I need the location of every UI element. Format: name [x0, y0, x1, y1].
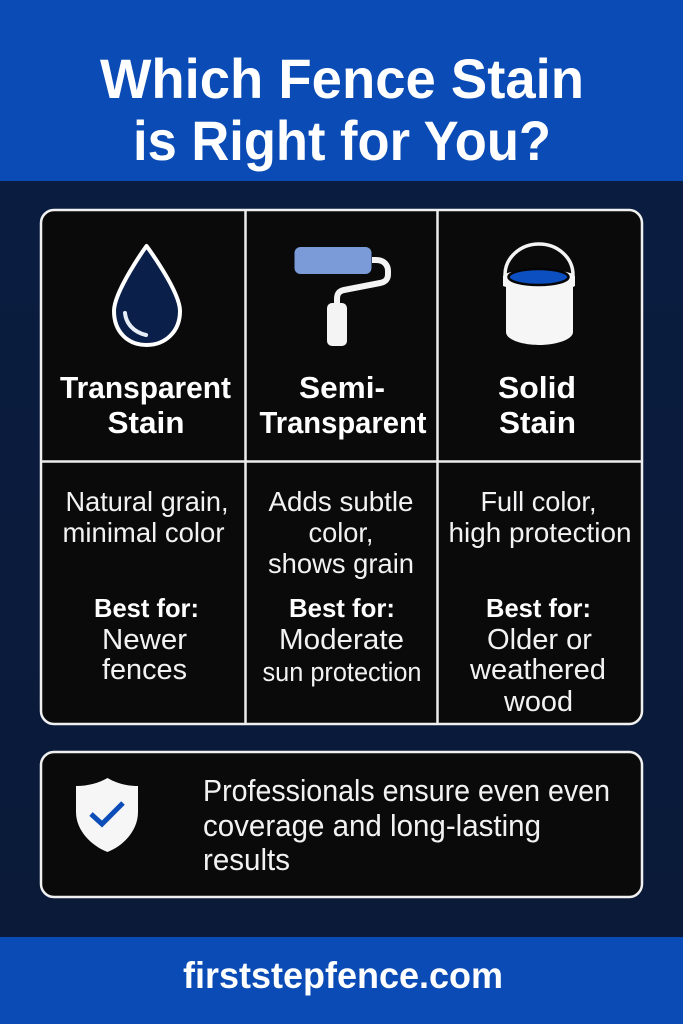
text: solid stain details: [448, 486, 632, 718]
callout text: [203, 773, 610, 877]
text: transparent details: Natural grain,: [66, 486, 228, 517]
text: solid stain details: Older or: [487, 624, 592, 656]
icon: water drop: [114, 246, 180, 345]
text: transparent details: [62, 486, 228, 686]
text: semi-transparent details: [262, 486, 422, 687]
text: semi-transparent details: shows grain: [268, 548, 414, 579]
icon: paint bucket: [503, 244, 575, 345]
icon: paint roller: [294, 247, 388, 346]
column heading: solid stain: [498, 370, 576, 440]
title: Which Fence Stain: [100, 47, 584, 110]
callout text: results: [203, 842, 290, 877]
text: transparent details: minimal color: [62, 517, 224, 548]
text: solid stain details: high protection: [448, 517, 632, 548]
text: semi-transparent details: Best for:: [289, 593, 395, 623]
panel: professionals callout: [41, 752, 642, 897]
website url: firststepfence.com: [183, 955, 503, 996]
title: [100, 47, 584, 172]
text: semi-transparent details: Moderate: [279, 624, 404, 656]
title: is Right for You?: [133, 109, 551, 172]
text: solid stain details: Full color,: [480, 486, 596, 517]
text: transparent details: Newer: [102, 624, 187, 656]
text: solid stain details: wood: [503, 686, 573, 718]
column heading: semi-transparent: [260, 370, 426, 440]
text: semi-transparent details: Adds subtle: [268, 486, 414, 517]
column heading: semi-transparent: Semi-: [299, 370, 385, 405]
column heading: semi-transparent: Transparent: [260, 405, 426, 440]
column heading: transparent stain: Transparent: [60, 370, 231, 405]
footer banner: [0, 937, 683, 1024]
text: solid stain details: Best for:: [486, 593, 591, 623]
panel: comparison table: [41, 210, 642, 724]
text: transparent details: fences: [102, 654, 187, 686]
text: transparent details: Best for:: [94, 593, 199, 623]
header banner: [0, 0, 683, 181]
text: semi-transparent details: color,: [308, 517, 374, 548]
column heading: solid stain: Stain: [499, 405, 576, 440]
callout text: coverage and long-lasting: [203, 808, 541, 843]
column heading: transparent stain: [60, 370, 231, 440]
callout text: Professionals ensure even even: [203, 773, 610, 808]
icon: shield with check: [76, 778, 138, 852]
column heading: transparent stain: Stain: [108, 405, 184, 440]
column heading: solid stain: Solid: [498, 370, 576, 405]
text: semi-transparent details: sun protection: [262, 657, 422, 687]
text: solid stain details: weathered: [469, 654, 606, 686]
